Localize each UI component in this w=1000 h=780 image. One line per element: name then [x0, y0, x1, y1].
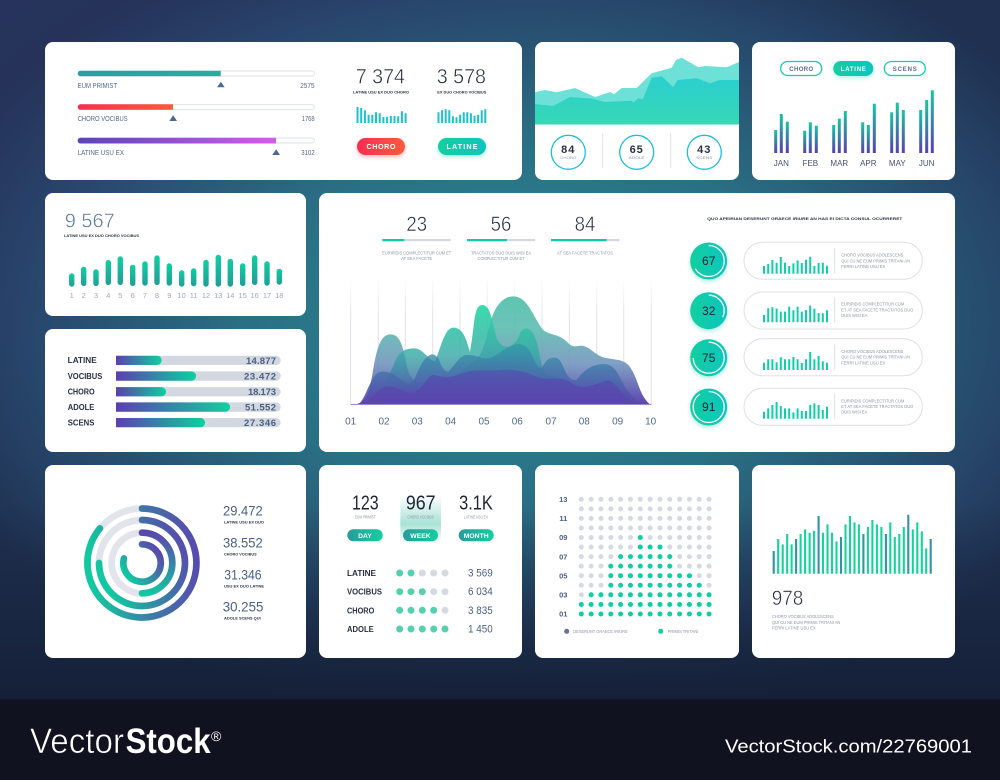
logo	[30, 722, 222, 761]
row: adole	[347, 624, 493, 636]
layered area chart	[351, 296, 651, 404]
value: 31.346: USU EX DUO LATINE	[224, 584, 264, 588]
stat: 7 374	[353, 65, 409, 155]
big number: 978	[772, 587, 803, 610]
month labels	[774, 159, 935, 168]
kpi: 56	[467, 213, 535, 261]
axis numbers: 18	[275, 291, 283, 300]
gauge: adole: ADOLE	[629, 156, 645, 160]
row: 32: 32	[702, 304, 716, 318]
stat: 3 578: EX DUO CHORO VOCIBUS	[437, 90, 487, 94]
pill: scens	[884, 62, 925, 76]
progress bar: choro vocibus: CHORO VOCIBUS	[78, 116, 128, 123]
row: latine: 14.877	[246, 356, 276, 367]
kpi: 56: TRACTATOS DUO DUIS WISI EA	[471, 250, 531, 256]
row: adole: ADOLE	[347, 625, 374, 634]
y axis labels: 07	[559, 552, 567, 561]
kpi: 23: EURIPIDIS COMPLECTITUR CUM ET	[382, 250, 451, 256]
kpi: 84	[551, 213, 619, 256]
value: 38.552: CHORO VOCIBUS	[224, 552, 257, 556]
kpi: 84: 84	[575, 213, 596, 236]
x axis labels: 09	[612, 416, 624, 427]
kpi: 23	[382, 213, 451, 261]
axis numbers: 4	[106, 291, 110, 300]
panel: radial chart	[45, 465, 306, 658]
x axis labels	[345, 416, 657, 427]
y axis labels: 13	[559, 495, 567, 504]
row: scens: SCENS	[68, 419, 95, 428]
row: 32: EURIPIDIS COMPLECTITUR CUM	[841, 302, 905, 307]
row: choro	[347, 605, 493, 617]
big number: 9 567	[65, 210, 115, 232]
row: latine: LATINE	[347, 569, 377, 578]
axis numbers: 13	[214, 291, 222, 300]
axis numbers: 9	[167, 291, 171, 300]
row: 91	[690, 388, 922, 426]
kpi: 23: AT SEA FACETE	[401, 256, 432, 261]
row: scens: 27.346	[244, 418, 276, 429]
panel: fine bars	[752, 465, 955, 658]
period: month: LATINE USU EX	[464, 514, 488, 519]
row: 75: 75	[702, 351, 716, 365]
highlight	[400, 495, 441, 542]
pill: latine	[833, 61, 873, 76]
row: latine: LATINE	[68, 356, 97, 365]
y axis labels: 01	[559, 610, 567, 619]
panel: main chart	[319, 193, 955, 452]
panel: area chart	[535, 42, 739, 180]
axis numbers: 16	[251, 291, 259, 300]
row: 91: 91	[702, 400, 716, 414]
row: choro: 18.173	[248, 387, 276, 398]
stat: 3 578: 3 578	[437, 65, 486, 88]
period: day: 123	[352, 492, 379, 514]
row: adole: 1 450	[468, 624, 493, 636]
row: 32: ET AT SEA FACETE TRACTATOS DUO	[841, 307, 914, 312]
row: 75: FERRI LATINE USU EX	[841, 360, 885, 365]
gauge: scens: SCENS	[696, 156, 713, 160]
row: scens	[68, 418, 281, 429]
row: latine: 3 569	[468, 568, 493, 580]
y axis labels: 03	[559, 590, 567, 600]
side heading: QUO APEIRIAN DESERUNT GRAECE IRIURE AN HAS EI DICTA CONSUL OCURRERET	[707, 217, 903, 221]
row: vocibus: 6 034	[468, 586, 493, 598]
progress bar: latine usu ex: 3102	[301, 150, 315, 157]
footer bar	[0, 700, 1000, 780]
row: latine	[347, 568, 493, 580]
rounded bars	[69, 255, 282, 287]
month labels: JUN	[919, 159, 935, 168]
progress bar: choro vocibus	[78, 104, 315, 123]
period: week: CHORO VOCIBUS	[407, 514, 434, 519]
kpi: 56: 56	[491, 213, 511, 236]
y axis labels	[559, 495, 567, 619]
progress bar: choro vocibus: 1768	[302, 116, 315, 123]
row: choro: CHORO	[347, 606, 374, 615]
x axis labels: 02	[378, 416, 390, 427]
x axis labels: 08	[579, 416, 590, 427]
kpi: 23: 23	[406, 213, 427, 236]
row: vocibus: VOCIBUS	[68, 372, 103, 381]
row: vocibus: 23.472	[244, 372, 276, 382]
description: CHORO VOCIBUS ADOLESCENS	[772, 614, 834, 619]
description: FERRI LATINE USU EX	[772, 626, 816, 630]
concentric rings	[87, 508, 196, 618]
row: 91: DUIS WISI EA	[841, 410, 867, 415]
progress bar: latine usu ex	[78, 138, 315, 157]
value: 29.472: LATINE USU EX DUO	[224, 520, 264, 524]
row: 67: CHORO VOCIBUS ADOLESCENS	[841, 253, 903, 258]
logo: Stock	[126, 722, 211, 761]
axis numbers	[70, 291, 283, 300]
period: day	[347, 492, 383, 541]
kpi: 56: COMPLECTITUR CUM ET	[478, 256, 525, 261]
axis numbers: 3	[94, 291, 98, 300]
row: 91: ET AT SEA FACETE TRACTATOS DUO	[841, 404, 914, 409]
kpi: 84: AT SEA FACETE TRACTATOS	[557, 250, 613, 256]
x axis labels: 01	[345, 416, 357, 427]
row: 67: QUI CU NE EUM PRIMIS TRITANI AN	[841, 258, 910, 263]
axis numbers: 7	[143, 291, 147, 300]
axis numbers: 11	[190, 291, 198, 300]
panel: rounded bar chart	[45, 193, 306, 316]
description	[772, 614, 840, 630]
dot grid	[581, 499, 709, 614]
row: 75: CHORO VOCIBUS ADOLESCENS	[841, 349, 903, 354]
logo: ®	[211, 728, 222, 744]
value: 30.255: 30.255	[223, 598, 264, 614]
pill: choro: CHORO	[789, 67, 814, 73]
panel: dot matrix	[535, 465, 739, 658]
pill: scens: SCENS	[893, 67, 917, 73]
progress bar: eum primist: 2575	[300, 83, 315, 90]
row: 32	[690, 292, 922, 329]
gauge: choro	[551, 135, 585, 169]
period: day: EUM PRIMIST	[355, 514, 376, 519]
axis numbers: 6	[131, 291, 135, 300]
pill: latine: LATINE	[841, 67, 866, 73]
panel: horizontal bars	[45, 329, 306, 452]
axis numbers: 10	[178, 291, 186, 300]
gauge: scens	[687, 135, 721, 169]
axis numbers: 14	[226, 291, 234, 300]
row: 67: FERRI LATINE USU EX	[841, 264, 885, 269]
caption: LATINE USU EX DUO CHORO VOCIBUS	[64, 234, 139, 238]
axis numbers: 1	[70, 291, 74, 300]
value: 38.552	[223, 534, 263, 556]
axis numbers: 5	[118, 291, 122, 300]
stat: 3 578	[437, 65, 487, 155]
panel: progress bars and stats	[45, 42, 522, 180]
gauge: adole	[620, 135, 654, 169]
gauge: adole: 65	[630, 144, 644, 156]
row: adole: ADOLE	[68, 403, 95, 412]
row: 67: 67	[702, 254, 716, 268]
axis numbers: 17	[263, 291, 271, 300]
gauge: choro: 84	[561, 144, 575, 156]
logo: Vector	[30, 722, 124, 761]
row: choro	[68, 387, 281, 398]
row: adole: 51.552	[245, 402, 276, 414]
y axis labels: 09	[559, 533, 567, 542]
month labels: APR	[860, 159, 877, 168]
value: 29.472: 29.472	[223, 502, 263, 518]
row: adole	[68, 402, 281, 414]
value: 31.346	[224, 566, 264, 588]
legend	[564, 629, 698, 634]
row: 32: DUIS WISI EA	[841, 313, 867, 318]
value: 30.255: ADOLE SCENS QUI	[224, 616, 261, 620]
row: 75	[690, 339, 922, 376]
area chart	[535, 58, 739, 125]
month labels: MAY	[889, 159, 906, 168]
period: week: WEEK	[410, 533, 431, 540]
row: latine	[68, 356, 281, 367]
month labels: MAR	[830, 159, 848, 168]
row: 75: QUI CU NE EUM PRIMIS TRITANI AN	[841, 355, 910, 360]
x axis labels: 10	[645, 416, 657, 427]
period: month: MONTH	[464, 533, 489, 540]
value: 38.552: 38.552	[223, 534, 263, 550]
period: month: 3.1K	[459, 492, 493, 514]
panel: day week month	[319, 465, 522, 658]
stat: 7 374: CHORO	[366, 142, 396, 151]
y axis labels: 05	[559, 571, 567, 580]
description: QUI CU NE EUM PRIMIS TRITANI AN	[772, 620, 840, 625]
month labels: JAN	[774, 159, 789, 168]
x axis labels: 07	[545, 416, 557, 427]
gauge: choro: CHORO	[560, 156, 577, 160]
row: 67	[690, 242, 922, 280]
row: choro: 3 835	[468, 605, 493, 617]
progress bar: eum primist: EUM PRIMIST	[78, 83, 118, 90]
row: 91: EURIPIDIS COMPLECTITUR CUM	[841, 399, 905, 404]
month labels: FEB	[803, 159, 818, 168]
legend: DESERUNT GRAECE IRIURE	[573, 629, 628, 634]
x axis labels: 04	[445, 416, 457, 427]
panel: monthly bars	[752, 42, 955, 180]
gauge: scens: 43	[697, 144, 711, 156]
axis numbers: 8	[155, 291, 159, 300]
progress bar: latine usu ex: LATINE USU EX	[78, 150, 124, 157]
axis numbers: 2	[82, 291, 86, 300]
image id: VectorStock.com/22769001	[725, 736, 972, 757]
x axis labels: 06	[512, 416, 523, 427]
y axis labels: 11	[559, 514, 567, 523]
period: week	[403, 492, 438, 541]
x axis labels: 05	[478, 416, 490, 427]
period: day: DAY	[358, 533, 372, 540]
bar chart	[774, 515, 931, 574]
stat: 3 578: LATINE	[446, 142, 478, 151]
axis numbers: 15	[239, 291, 247, 300]
pill: choro	[781, 62, 822, 76]
row: vocibus: VOCIBUS	[347, 588, 383, 597]
row: choro: CHORO	[68, 388, 95, 397]
legend: PRIMIS TRITANI	[668, 629, 698, 634]
value: 31.346: 31.346	[224, 566, 262, 582]
stat: 7 374: LATINE USU EX DUO CHORO	[353, 90, 409, 94]
period: week: 967	[406, 492, 436, 514]
grouped bar chart	[774, 90, 934, 153]
row: vocibus	[68, 371, 281, 382]
axis numbers: 12	[202, 291, 210, 300]
period: month	[459, 492, 494, 541]
row: vocibus	[347, 586, 493, 598]
x axis labels: 03	[412, 416, 423, 427]
stat: 7 374: 7 374	[356, 65, 405, 88]
progress bar: eum primist	[78, 71, 315, 90]
